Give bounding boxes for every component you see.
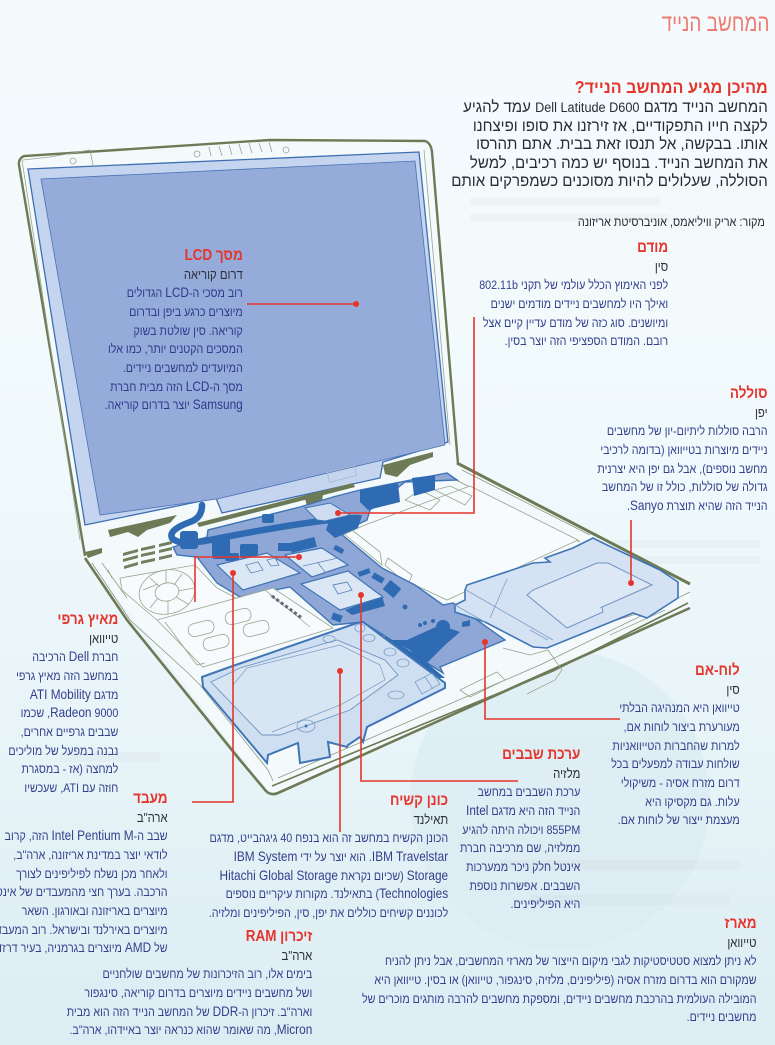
callout: battery: ניידים מיוצרות בטייוואן (בדומה לרכיבי: [601, 443, 768, 457]
callout: RAM: בימים אלו, רוב הזיכרונות של מחשבים שולחניים: [102, 967, 312, 981]
callout: chipset: מלזיה: [553, 766, 580, 781]
callout: graphics accelerator: חברת Dell הרכיבה: [32, 649, 118, 664]
callout: chassis: מארז: [725, 915, 757, 932]
base chassis outline: [85, 452, 690, 796]
callout: modem: רובם. המודם הספציפי הזה יוצר בסין.: [504, 334, 668, 348]
callout: chassis: המובילה העולמית בהרכבת מחשבים ניידים, ומספקת מחשבים להרבה מותגים מוכרים של: [362, 992, 757, 1006]
intro text block: המחשב הנייד מדגם Dell Latitude D600 עמד להגיע: [463, 99, 768, 116]
callout: modem: סין: [655, 259, 668, 274]
callout: motherboard: מעצמת ייצור של לוחות אם.: [618, 813, 740, 827]
callout: motherboard: שולחות עבודה למפעלים בכל: [612, 757, 740, 771]
callout: RAM: ארה"ב: [281, 948, 312, 963]
callout: LCD screen: מיוצרים כרגע ביפן ובדרום: [129, 305, 243, 319]
callout: RAM: [66, 928, 312, 1037]
callout: graphics accelerator: מדגם ATI Mobility: [30, 687, 118, 702]
callout: battery: הנייד הזה שהיא תוצרת Sanyo.: [627, 498, 768, 513]
callout: battery: גדולה של סוללות, כולל זו של המחשב: [602, 480, 768, 494]
callout: motherboard: דרום מזרח אסיה - משיקולי: [621, 776, 740, 790]
callout: chipset: ערכת השבבים במחשב: [477, 785, 580, 799]
intro text block: את המחשב הנייד. בנוסף יש כמה רכיבים, למשל: [470, 154, 768, 172]
callout: graphics accelerator: טייוואן: [89, 631, 118, 646]
callout: RAM: ושל מחשבים ניידים מיוצרים בדרום קוריאה, סינגפור: [84, 986, 312, 1000]
callout: battery: [598, 385, 768, 513]
callout: chipset: אינטל חלק ניכר ממערכות: [466, 860, 580, 874]
callout: battery: מחשב נוספים), אבל גם יפן היא יצרנית: [598, 462, 768, 476]
callout: processor: שבב ה-Intel Pentium M הזה, קרוב: [5, 828, 168, 843]
hinge grooves on lid: [209, 142, 272, 156]
callout: hard drive: IBM Travelstar. הוא יוצר על ידי IBM System: [233, 849, 448, 864]
screen bezel: [28, 152, 448, 525]
callout: motherboard: עלות. גם מקסיקו היא: [646, 795, 740, 809]
callout: chipset: ערכת שבבים: [502, 746, 580, 763]
intro text block: אותו. בבקשה, אל תנסו זאת בבית. אתם תהרסו: [476, 136, 768, 153]
callout: LCD screen: מסך ה-LCD הזה מבית חברת: [110, 379, 243, 394]
callout: battery: סוללה: [730, 385, 768, 402]
callout: graphics accelerator: [8, 611, 118, 795]
callout: hard drive: לכוננים קשיחים כוללים את יפן, סין, הפיליפינים ומלזיה.: [209, 906, 448, 920]
callout: hard drive: [209, 792, 448, 920]
callout: modem: [479, 239, 668, 348]
callout: LCD screen: רוב מסכי ה-LCD הגדולים: [127, 285, 243, 300]
callout: processor: ולאחר מכן נשלח לפיליפינים לצורך: [17, 867, 168, 881]
page title: המחשב הנייד: [661, 10, 769, 37]
callout: LCD screen: Samsung יוצר בדרום קוריאה.: [105, 397, 243, 412]
intro text block: הסוללה, שעלולים להיות מסוכנים כשמפרקים אותם: [451, 173, 768, 190]
callout: chassis: טייוואן: [728, 935, 757, 950]
fan and memory door: [120, 565, 333, 667]
callout: graphics accelerator: נבנה במפעל של מוליכים: [8, 744, 118, 758]
callout: processor: מעבד: [134, 790, 168, 807]
callout: processor: [0, 790, 168, 955]
callout: graphics accelerator: במחשב הזה מאיץ גרפי: [16, 669, 118, 683]
callout: modem: ומיושנים. סוג כזה של מודם עדיין קיים אצל: [483, 316, 668, 330]
callout: chipset: 855PM ויכולה היתה להגיע: [462, 823, 580, 837]
callout: chassis: לא ניתן למצוא סטטיסטיקות לגבי מיקום הייצור של מארזי המחשבים, אבל ניתן להניח: [385, 954, 757, 968]
callout: chassis: מחשבים ניידים.: [687, 1010, 757, 1024]
callout: battery: יפן: [755, 405, 768, 420]
callout: motherboard: לוח-אם: [695, 662, 740, 679]
callout: graphics accelerator: למחצה (אז - במסגרת: [21, 762, 118, 776]
hinge bars: [108, 515, 177, 537]
deck / palm rest outlines: [338, 486, 578, 600]
callout: motherboard: מעורערת ביצור לוחות אם,: [624, 720, 740, 734]
callout: LCD screen: דרום קוריאה: [184, 267, 243, 282]
memory chip board: [285, 548, 348, 577]
intro text block: [451, 77, 768, 190]
callout: chipset: הנייד הזה היא מדגם Intel: [466, 803, 580, 818]
callout leader lines: [192, 304, 631, 832]
hard drive: [202, 622, 445, 763]
callout: processor: ארה"ב: [137, 810, 168, 825]
callout: chassis: [362, 915, 757, 1024]
callout: hard drive: הכונן הקשיח במחשב זה הוא בנפח 40 גיגהבייט, מדגם: [209, 831, 448, 845]
callout: hard drive: תאילנד: [413, 812, 448, 827]
source credit: מקור: אריק וויליאמס, אוניברסיטת אריזונה: [578, 215, 765, 229]
callout: chipset: השבבים. אפשרות נוספת: [469, 879, 580, 893]
callout: LCD screen: קוריאה. סין שולטת בשוק: [134, 324, 243, 338]
callout: motherboard: [612, 662, 740, 827]
callout: chassis: שמקורם הוא בדרום מזרח אסיה (פיליפינים, מלזיה, סינגפור, טייוואן) או בסין. טייוואן היא: [375, 973, 757, 987]
callout: graphics accelerator: חוזה עם ATI, שעכשיו: [24, 781, 118, 795]
callout: RAM: זיכרון RAM: [245, 928, 312, 945]
intro text block: מהיכן מגיע המחשב הנייד?: [575, 77, 768, 97]
callout: chipset: ממלזיה, שם מרכיבה חברת: [460, 841, 580, 855]
ghost background circle: [410, 650, 710, 950]
callout: modem: ואילך היו למחשבים ניידים מודמים ישנים: [491, 297, 668, 311]
callout: hard drive: כונן קשיח: [390, 792, 448, 809]
callout: RAM: וארה"ב. זיכרון ה-DDR של המחשב הנייד הזה הוא מבית: [66, 1004, 312, 1019]
screen panel: [41, 161, 445, 515]
callout: LCD screen: [105, 247, 243, 412]
callout: motherboard: למרות שהחברות הטייוואניות: [613, 739, 740, 753]
callout: modem: מודם: [637, 239, 668, 256]
vents: [123, 541, 172, 569]
lid: [19, 140, 458, 556]
callout: hard drive: Storage (שכיום נקראת Hitachi Global Storage: [219, 868, 448, 883]
modem card: [305, 503, 350, 521]
callout: battery: הרבה סוללות ליתיום-יון של מחשבים: [607, 424, 768, 438]
callout: LCD screen: המסכים הקטנים יותר, כמו אלו: [108, 342, 243, 356]
dark connectors and cable: [180, 475, 470, 678]
callout: processor: מיוצרים באריזונה ובאורגון. השאר: [22, 904, 168, 918]
callout: LCD screen: מסך LCD: [185, 247, 243, 264]
callout: chipset: היא הפיליפינים.: [510, 897, 580, 911]
callout: graphics accelerator: Radeon 9000, שכמו: [20, 705, 118, 720]
motherboard: [171, 473, 505, 678]
callout: chipset: [460, 746, 580, 911]
callout: graphics accelerator: מאיץ גרפי: [57, 611, 118, 628]
chipset board: [301, 571, 383, 610]
callout: motherboard: טייוואן היא המנהיגה הבלתי: [620, 701, 740, 715]
callout: RAM: Micron, מה שאומר שהוא כנראה יוצר באיידהו, ארה"ב.: [69, 1022, 312, 1037]
intro text block: לקצה חייו התפקודיים, אז זירזנו את סופו ופיצחנו: [473, 118, 768, 134]
callout: processor: לודאי יוצר במדינת אריזונה, ארה"ב,: [14, 848, 168, 862]
callout: modem: לפני האימוץ הכלל עולמי של תקני 802.11b: [479, 278, 668, 292]
graphics card: [217, 553, 300, 590]
callout: hard drive: Technologies) בתאילנד. מקורות עיקריים נוספים: [225, 886, 448, 901]
callout: graphics accelerator: שבבים גרפיים אחרים,: [20, 725, 118, 739]
callout: LCD screen: המיועדים למחשבים ניידים.: [123, 361, 243, 375]
callout: motherboard: סין: [727, 682, 740, 697]
battery: [455, 538, 678, 648]
